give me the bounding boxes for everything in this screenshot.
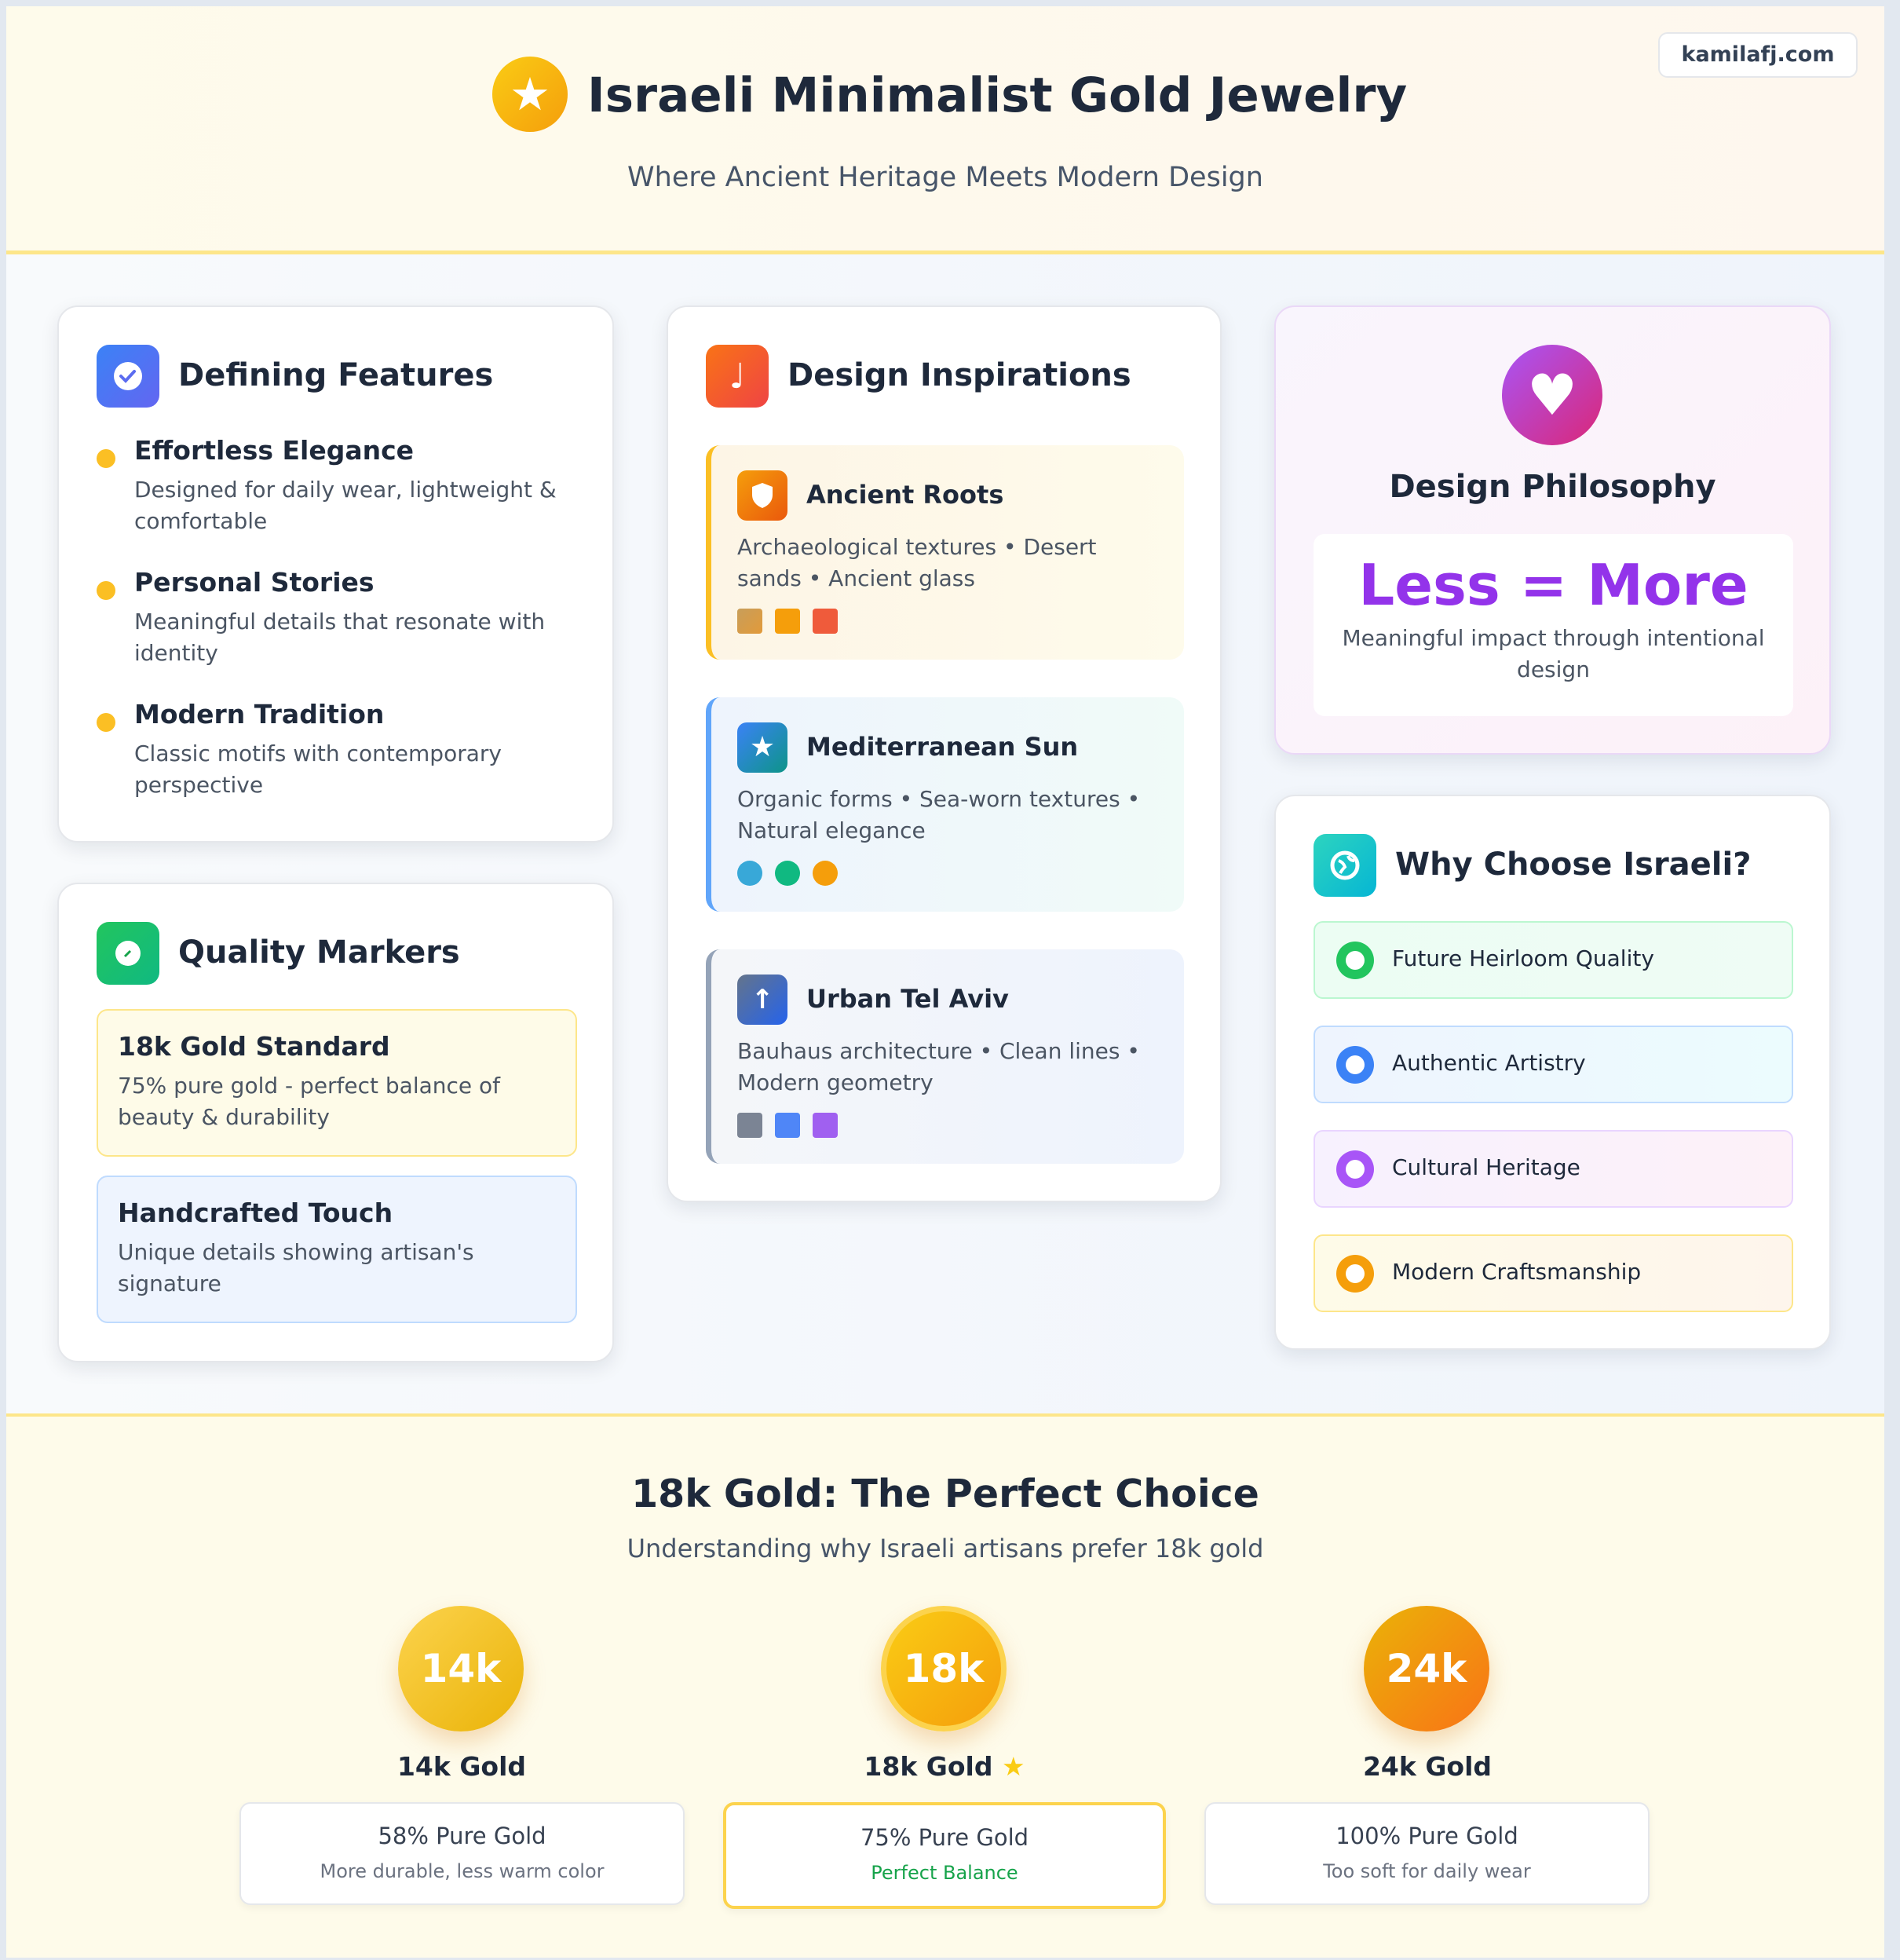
icon: check bbox=[97, 345, 159, 408]
site badge: kamilafj.com bbox=[1682, 42, 1834, 67]
title: Israeli Minimalist Gold Jewelry bbox=[587, 68, 1407, 123]
panel: why choose israeli bbox=[1274, 795, 1831, 1350]
panel: quality markers bbox=[57, 883, 614, 1362]
item: effortless: Effortless Elegance bbox=[134, 435, 414, 466]
item: heritage bbox=[1314, 1130, 1793, 1208]
box: 18k: Perfect Balance bbox=[871, 1862, 1018, 1884]
item: craftsmanship bbox=[1314, 1234, 1793, 1312]
section: 18k gold comparison bbox=[6, 1413, 1884, 1958]
item: personal: Meaningful details that resonate with identity bbox=[134, 609, 545, 666]
coin: 14k bbox=[398, 1606, 524, 1731]
label: 18k gold: 18k Gold ★ bbox=[864, 1751, 1025, 1782]
heading: Defining Features bbox=[178, 357, 493, 393]
coin: 24k bbox=[1364, 1606, 1489, 1731]
panel: design inspirations bbox=[667, 305, 1222, 1202]
card: mediterranean sun: ★ bbox=[750, 731, 775, 763]
heading: Design Inspirations bbox=[787, 357, 1131, 393]
item: craftsmanship: Modern Craftsmanship bbox=[1392, 1259, 1641, 1285]
item: heirloom bbox=[1314, 921, 1793, 999]
icon: star badge bbox=[492, 57, 568, 132]
coin: 24k: 24k bbox=[1387, 1646, 1467, 1691]
callout: less = more: Meaningful impact through intentional design bbox=[1342, 625, 1765, 682]
heading: Quality Markers bbox=[178, 934, 460, 971]
icon: heart bbox=[1502, 345, 1602, 445]
callout: less = more: Less = More bbox=[1358, 552, 1748, 618]
card: urban tel aviv: ↑ bbox=[751, 984, 773, 1015]
box: handcrafted bbox=[97, 1176, 577, 1323]
box: 24k bbox=[1204, 1802, 1650, 1905]
card: mediterranean sun: Mediterranean Sun bbox=[806, 732, 1078, 762]
label: 14k gold: 14k Gold bbox=[397, 1751, 526, 1782]
callout: less = more bbox=[1314, 534, 1793, 716]
coin: 14k: 14k bbox=[421, 1646, 501, 1691]
card: mediterranean sun: Organic forms • Sea-worn textures • Natural elegance bbox=[737, 786, 1140, 843]
box: 18k standard bbox=[97, 1009, 577, 1157]
icon: music: ♩ bbox=[729, 357, 745, 396]
item: personal: Personal Stories bbox=[134, 567, 375, 598]
card: ancient roots: Ancient Roots bbox=[806, 480, 1003, 510]
icon: heart: ♥ bbox=[1527, 362, 1577, 428]
item: effortless bbox=[97, 435, 557, 534]
icon: music bbox=[706, 345, 769, 408]
box: 14k: 58% Pure Gold bbox=[378, 1823, 546, 1849]
box: handcrafted: Handcrafted Touch bbox=[118, 1198, 393, 1228]
box: 24k: 100% Pure Gold bbox=[1335, 1823, 1518, 1849]
box: 18k standard: 18k Gold Standard bbox=[118, 1031, 390, 1062]
card: mediterranean sun bbox=[706, 697, 1184, 912]
box: handcrafted: Unique details showing artisan's signature bbox=[118, 1239, 474, 1296]
box: 24k: Too soft for daily wear bbox=[1323, 1860, 1531, 1882]
icon: globe bbox=[1314, 834, 1376, 897]
heading: Why Choose Israeli? bbox=[1395, 847, 1751, 883]
card: urban tel aviv: Bauhaus architecture • Clean lines • Modern geometry bbox=[737, 1038, 1140, 1095]
item: modern: Modern Tradition bbox=[134, 699, 384, 730]
subtitle: Understanding why Israeli artisans prefer 18k gold bbox=[627, 1534, 1263, 1563]
panel: defining features bbox=[57, 305, 614, 843]
item: modern bbox=[97, 699, 502, 798]
box: 18k standard: 75% pure gold - perfect balance of beauty & durability bbox=[118, 1073, 500, 1130]
item: effortless: Designed for daily wear, lightweight & comfortable bbox=[134, 477, 557, 534]
header bbox=[6, 6, 1884, 254]
icon: star badge: ★ bbox=[510, 68, 550, 121]
heading: 18k Gold: The Perfect Choice bbox=[631, 1472, 1259, 1516]
box: 14k bbox=[239, 1802, 685, 1905]
card: ancient roots bbox=[706, 445, 1184, 660]
main area background bbox=[6, 254, 1884, 1413]
item: artistry bbox=[1314, 1026, 1793, 1103]
item: heirloom: Future Heirloom Quality bbox=[1392, 945, 1654, 971]
card: urban tel aviv bbox=[706, 949, 1184, 1164]
item: modern: Classic motifs with contemporary perspective bbox=[134, 740, 502, 798]
label: 24k gold: 24k Gold bbox=[1363, 1751, 1492, 1782]
item: artistry: Authentic Artistry bbox=[1392, 1050, 1586, 1076]
subtitle: Where Ancient Heritage Meets Modern Design bbox=[627, 162, 1263, 193]
coin: 18k bbox=[881, 1606, 1007, 1731]
item: heritage: Cultural Heritage bbox=[1392, 1154, 1580, 1180]
box: 18k bbox=[723, 1802, 1166, 1909]
panel: design philosophy bbox=[1274, 305, 1831, 755]
card: ancient roots: Archaeological textures • Desert sands • Ancient glass bbox=[737, 534, 1097, 591]
site badge bbox=[1658, 32, 1858, 78]
icon: gauge bbox=[97, 922, 159, 985]
box: 14k: More durable, less warm color bbox=[320, 1860, 605, 1882]
item: personal bbox=[97, 567, 545, 666]
box: 18k: 75% Pure Gold bbox=[860, 1824, 1029, 1851]
heading: Design Philosophy bbox=[1389, 469, 1716, 505]
card: urban tel aviv: Urban Tel Aviv bbox=[806, 984, 1009, 1014]
coin: 18k: 18k bbox=[904, 1646, 984, 1691]
